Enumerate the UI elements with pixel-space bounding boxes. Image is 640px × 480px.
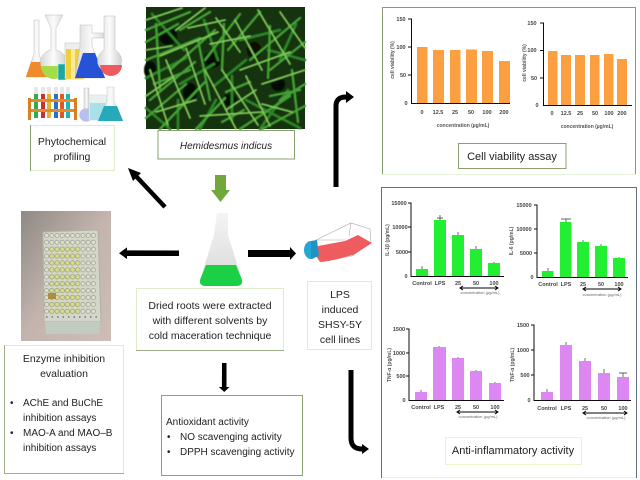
panel: anti-inflammatory <box>382 188 636 478</box>
arrow: to cell lines <box>248 247 296 260</box>
box: phytochemical profiling <box>30 125 114 171</box>
box: dried roots extraction: with different solvents by <box>152 315 268 327</box>
box: antioxidant activity: DPPH scavenging activity <box>180 447 294 458</box>
box: dried roots extraction: Dried roots were extracted <box>148 300 272 312</box>
chart: IL-6 <box>509 203 628 297</box>
box: LPS induced cell lines <box>308 282 372 350</box>
box: dried roots extraction <box>136 288 284 350</box>
chart: IL-6: LPS <box>561 282 572 288</box>
chart: TNF-alpha right: 25 <box>582 406 588 412</box>
chart: cell viability right: 100 <box>604 111 614 117</box>
chart: TNF-alpha left: LPS <box>434 405 445 411</box>
icon: laboratory glassware <box>26 15 123 122</box>
chart: cell viability right: cell viability (%) <box>522 44 528 82</box>
chart: cell viability left: 100 <box>482 110 492 116</box>
chart: cell viability right: 25 <box>577 111 583 117</box>
chart: cell viability left: 100 <box>396 45 406 51</box>
arrow: to cell viability assay <box>336 91 354 187</box>
chart: TNF-alpha right: 0 <box>527 398 531 404</box>
chart: cell viability left: 50 <box>468 110 474 116</box>
box: LPS induced cell lines: cell lines <box>320 334 360 346</box>
chart: TNF-alpha right: 100 <box>618 406 628 412</box>
box: Hemidesmus indicus label <box>158 130 294 159</box>
box: enzyme inhibition evaluation: evaluation <box>40 368 88 380</box>
box: enzyme inhibition evaluation: Enzyme inhibition <box>23 353 105 365</box>
chart: cell viability left: 50 <box>400 73 406 79</box>
box: dried roots extraction: cold maceration technique <box>149 330 271 342</box>
chart: cell viability right: 0 <box>535 103 539 109</box>
box: phytochemical profiling: profiling <box>54 151 91 163</box>
chart: TNF-alpha right <box>510 323 631 420</box>
photo: microplate <box>21 211 111 341</box>
chart: cell viability left: 12.5 <box>433 110 443 116</box>
chart: IL-1 beta: 25 <box>455 281 461 287</box>
box: enzyme inhibition evaluation: • <box>10 398 14 409</box>
chart: IL-6: 15000 <box>516 203 532 209</box>
box: phytochemical profiling: Phytochemical <box>38 136 106 148</box>
chart: IL-1 beta: 10000 <box>392 225 408 231</box>
chart: TNF-alpha left: TNF-α (pg/mL) <box>387 348 393 382</box>
box: LPS induced cell lines: induced <box>322 304 359 316</box>
chart: cell viability left: concentration (µg/mL) <box>437 123 490 129</box>
chart: IL-6: 50 <box>598 282 604 288</box>
box: anti-inflammatory caption <box>446 438 582 464</box>
box: enzyme inhibition evaluation: inhibition assays <box>23 413 96 424</box>
chart: IL-6: 10000 <box>516 227 532 233</box>
box: Hemidesmus indicus label: Hemidesmus indicus <box>180 141 272 152</box>
chart: TNF-alpha left: Control <box>411 405 431 411</box>
chart: TNF-alpha right: 500 <box>520 373 530 379</box>
chart: TNF-alpha right: 50 <box>601 406 607 412</box>
chart: cell viability right: 12.5 <box>561 111 571 117</box>
chart: TNF-alpha left: 25 <box>455 405 461 411</box>
chart: TNF-alpha left: 500 <box>396 374 406 380</box>
chart: IL-6: 5000 <box>520 251 532 257</box>
arrow: to anti-inflammatory activity <box>351 370 369 454</box>
chart: TNF-alpha left: 50 <box>473 405 479 411</box>
chart: IL-6: IL-6 (pg/mL) <box>509 226 515 255</box>
icon: cell culture flask <box>304 223 372 262</box>
chart: cell viability left: cell viability (%) <box>390 41 396 79</box>
chart: cell viability left: 0 <box>404 101 408 107</box>
chart: IL-1 beta: 5000 <box>396 250 408 256</box>
chart: IL-1 beta: 15000 <box>391 201 407 207</box>
chart: IL-1 beta: concentration (µg/mL) <box>460 290 500 295</box>
box: antioxidant activity: • <box>167 432 171 443</box>
chart: IL-6: 25 <box>580 282 586 288</box>
chart: TNF-alpha right: Control <box>537 406 557 412</box>
chart: cell viability right: 150 <box>527 21 537 27</box>
chart: TNF-alpha right: 1500 <box>517 323 529 329</box>
box: enzyme inhibition evaluation: MAO-A and MAO–B <box>23 428 113 439</box>
chart: TNF-alpha right: TNF-α (pg/mL) <box>510 348 516 382</box>
box: LPS induced cell lines: SHSY-5Y <box>318 319 362 331</box>
chart: TNF-alpha left: 100 <box>490 405 500 411</box>
box: enzyme inhibition evaluation <box>4 345 124 474</box>
chart: cell viability right <box>522 21 632 130</box>
chart: cell viability left: 25 <box>452 110 458 116</box>
chart: IL-1 beta: 0 <box>404 274 408 280</box>
chart: IL-1 beta: LPS <box>435 281 446 287</box>
chart: cell viability right: 0 <box>550 111 554 117</box>
chart: IL-6: concentration (µg/mL) <box>582 292 622 297</box>
chart: TNF-alpha left: 0 <box>402 398 406 404</box>
box: anti-inflammatory caption: Anti-inflammatory activity <box>452 445 575 457</box>
chart: cell viability left: 150 <box>396 17 406 23</box>
chart: IL-1 beta <box>385 201 504 295</box>
chart: TNF-alpha right: concentration (µg/mL) <box>586 415 626 420</box>
chart: cell viability right: concentration (µg/mL) <box>561 124 614 130</box>
chart: IL-1 beta: 100 <box>489 281 499 287</box>
chart: cell viability right: 50 <box>531 76 537 82</box>
chart: TNF-alpha left: 1500 <box>393 327 405 333</box>
chart: IL-6: Control <box>538 282 558 288</box>
icon: extraction flask <box>200 213 242 286</box>
chart: TNF-alpha left: 1000 <box>393 351 405 357</box>
chart: TNF-alpha right: 1000 <box>517 348 529 354</box>
chart: cell viability right: 200 <box>617 111 627 117</box>
chart: IL-1 beta: 50 <box>473 281 479 287</box>
box: LPS induced cell lines: LPS <box>330 289 350 301</box>
chart: cell viability left: 0 <box>420 110 424 116</box>
chart: cell viability left <box>390 17 510 129</box>
box: antioxidant activity <box>162 396 302 476</box>
box: enzyme inhibition evaluation: inhibition assays <box>23 443 96 454</box>
arrow: to enzyme inhibition <box>119 247 179 259</box>
box: cell viability caption: Cell viability assay <box>467 151 557 163</box>
box: enzyme inhibition evaluation: AChE and BuChE <box>23 398 103 409</box>
chart: TNF-alpha right: LPS <box>561 406 572 412</box>
chart: cell viability right: 100 <box>527 48 537 54</box>
chart: cell viability left: 200 <box>499 110 509 116</box>
chart: TNF-alpha left <box>387 327 504 419</box>
chart: IL-6: 100 <box>614 282 624 288</box>
box: antioxidant activity: • <box>167 447 171 458</box>
panel: cell viability <box>382 8 636 174</box>
box: enzyme inhibition evaluation: • <box>10 428 14 439</box>
chart: cell viability right: 50 <box>592 111 598 117</box>
box: antioxidant activity: NO scavenging activity <box>180 432 282 443</box>
chart: IL-6: 0 <box>530 275 534 281</box>
box: antioxidant activity: Antioxidant activity <box>166 417 249 428</box>
box: cell viability caption <box>458 144 566 168</box>
photo: Hemidesmus indicus plant <box>144 7 305 129</box>
chart: IL-1 beta: IL-1β (pg/mL) <box>385 224 391 256</box>
arrow: green down arrow <box>211 175 230 202</box>
arrow: to phytochemical profiling <box>128 168 165 207</box>
chart: TNF-alpha left: concentration (µg/mL) <box>458 414 498 419</box>
chart: IL-1 beta: Control <box>412 281 432 287</box>
arrow: to antioxidant activity <box>219 363 230 392</box>
